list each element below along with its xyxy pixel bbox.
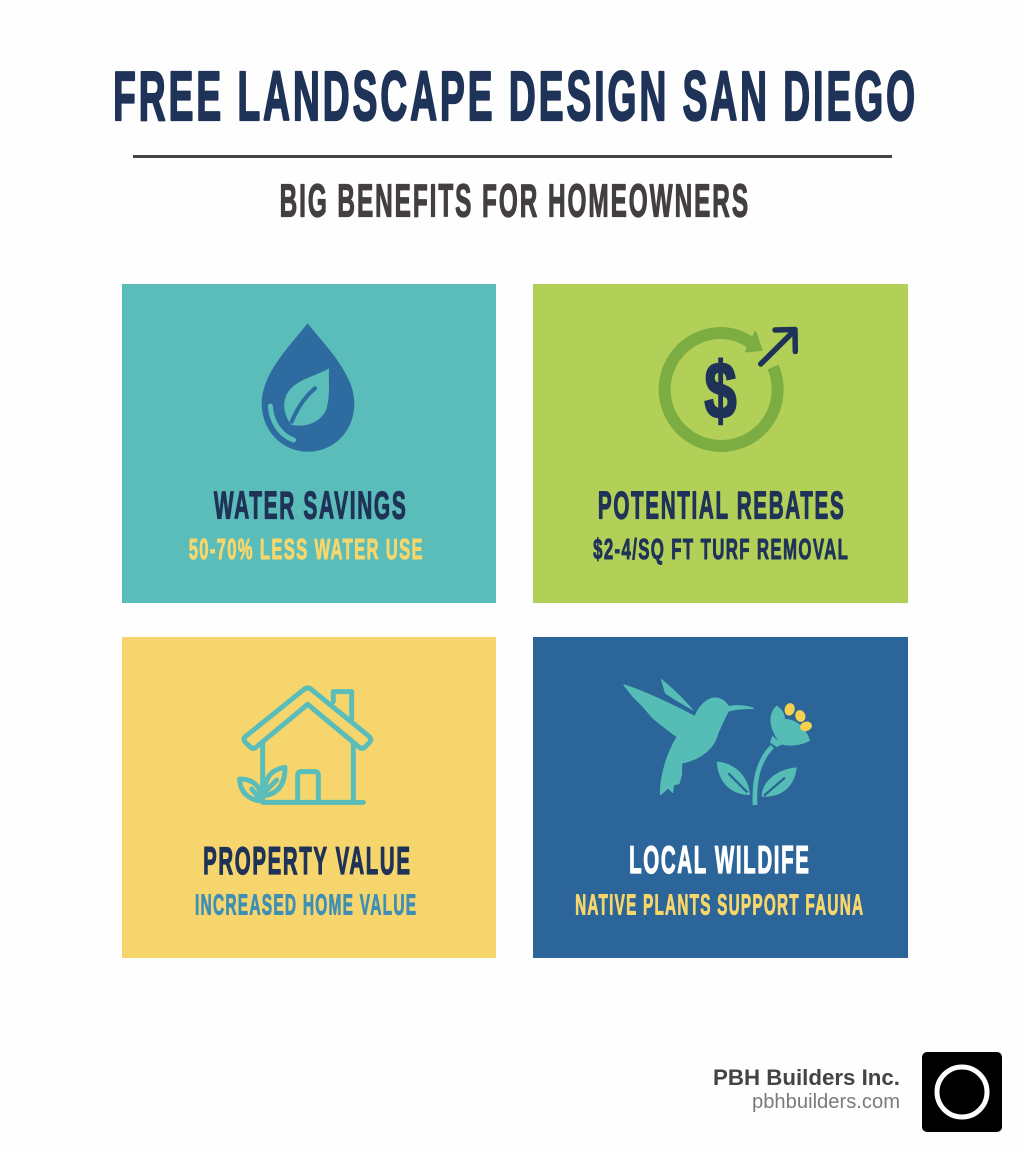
icon: water drop with leaf	[262, 323, 354, 452]
icon: circular arrow with dollar	[665, 330, 795, 446]
panel: potential rebates	[533, 284, 908, 603]
panel: water savings	[122, 284, 496, 603]
icon: hummingbird and flower	[624, 678, 813, 805]
panel background	[122, 284, 496, 603]
panel background	[122, 637, 496, 958]
icon: circular arrow with dollar: $	[704, 346, 737, 435]
logo	[922, 1052, 1002, 1132]
panel: property value	[122, 637, 496, 958]
panel background	[533, 284, 908, 603]
website: pbhbuilders.com	[752, 1091, 900, 1113]
icon: house with plant	[240, 688, 371, 802]
panel background	[533, 637, 908, 958]
panel: local wildlife	[533, 637, 908, 958]
brand name: PBH Builders Inc.	[713, 1065, 900, 1090]
